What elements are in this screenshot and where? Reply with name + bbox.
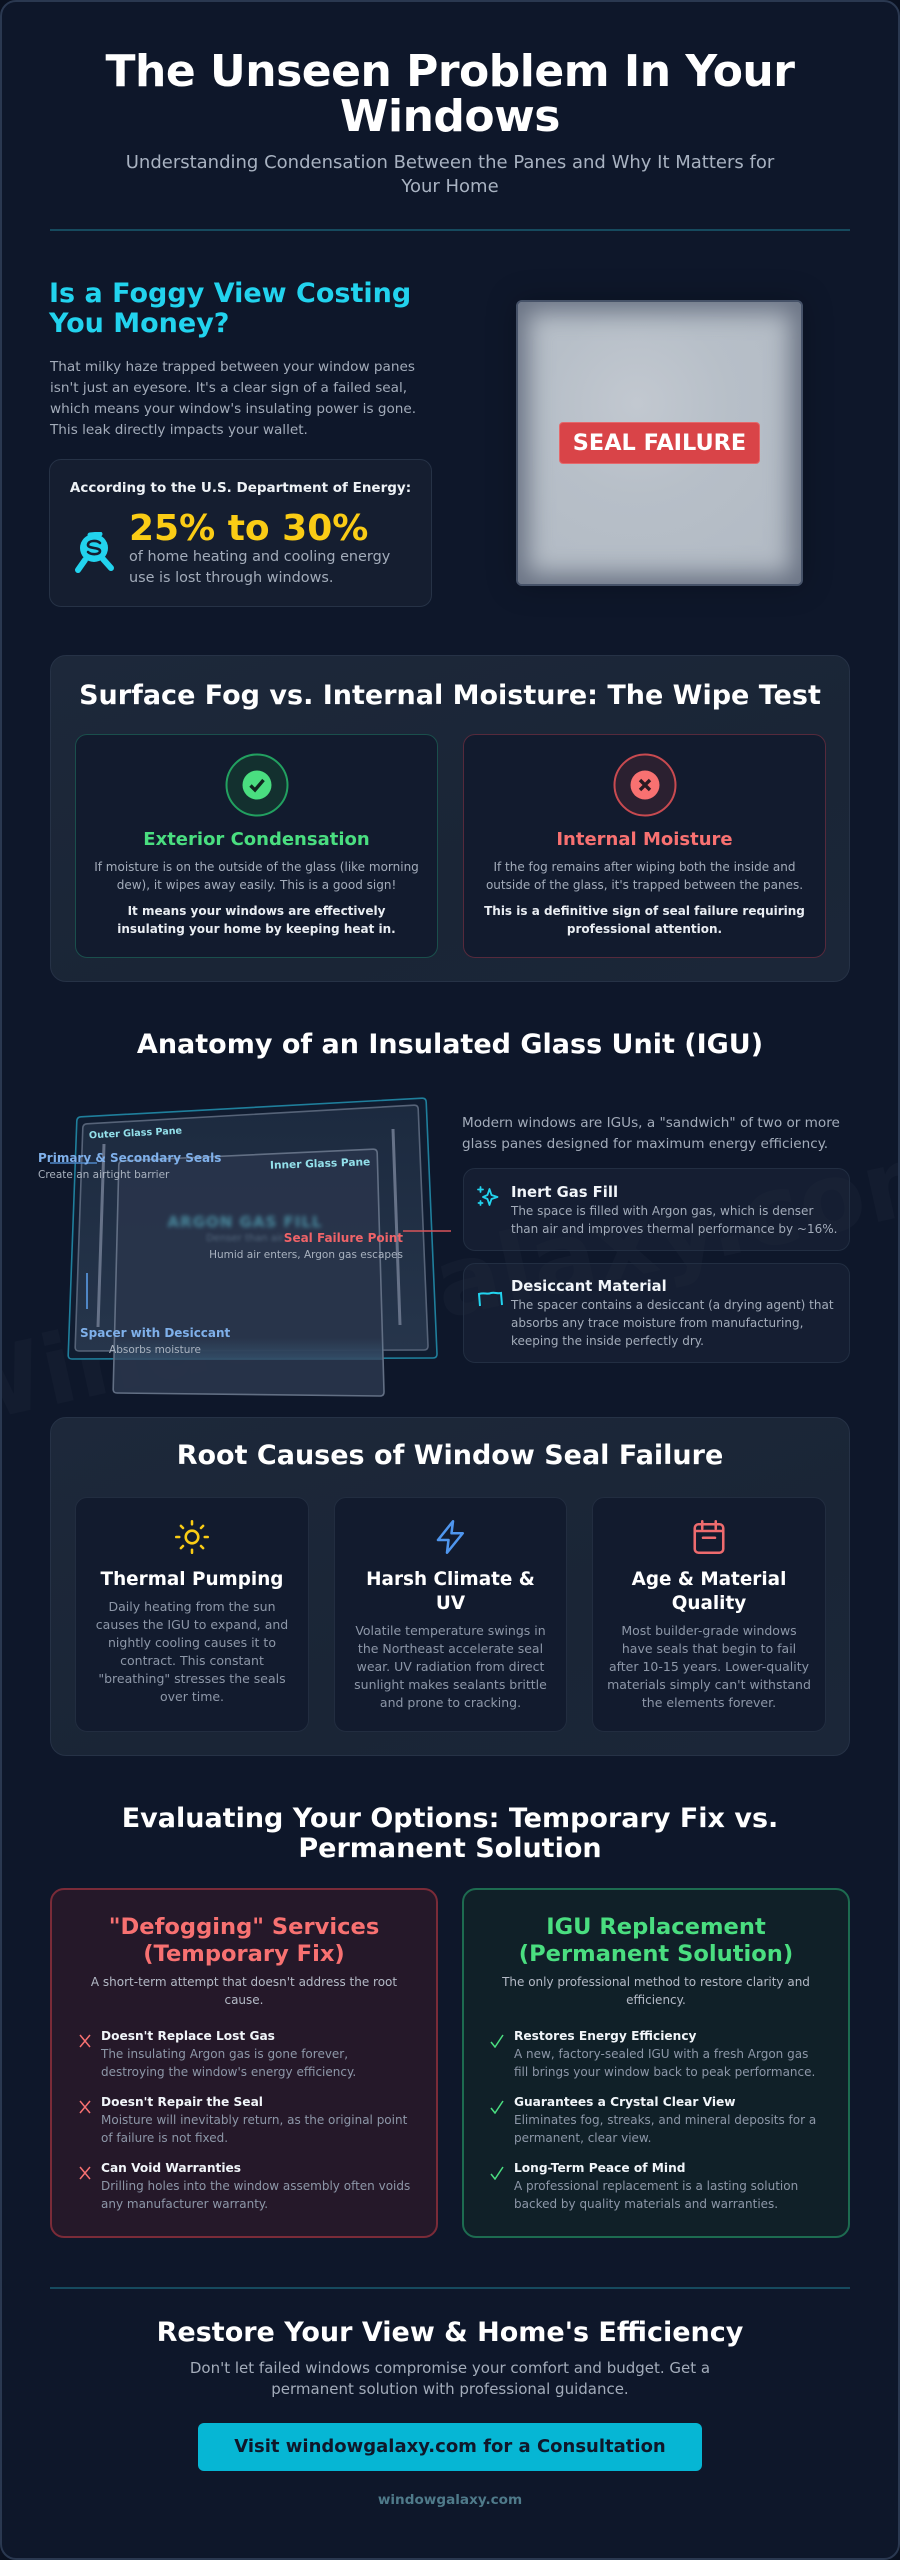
card title: UV xyxy=(436,1593,465,1614)
text: intro paragraph: That milky haze trapped between your window panes xyxy=(50,359,415,375)
subtitle: Your Home xyxy=(401,176,499,197)
title: The Unseen Problem In Your xyxy=(106,46,794,97)
icon: calendar xyxy=(693,1520,725,1554)
card text: over time. xyxy=(160,1689,224,1704)
divider xyxy=(50,2287,850,2289)
item text xyxy=(514,2045,815,2081)
icon: check xyxy=(490,2166,504,2180)
inner glass pane xyxy=(113,1149,384,1396)
card title: Harsh Climate & xyxy=(366,1569,535,1590)
panel title xyxy=(109,1914,379,1967)
card conclusion: insulating your home by keeping heat in. xyxy=(117,922,396,936)
label: spacer with desiccant: Absorbs moisture xyxy=(109,1344,201,1356)
card text: dew), it wipes away easily. This is a good sign! xyxy=(117,878,396,892)
card title: Thermal Pumping xyxy=(101,1569,283,1590)
label: seal failure point: Seal Failure Point xyxy=(284,1231,403,1245)
icon: cross xyxy=(614,754,676,816)
label: seal failure point: Humid air enters, Argon gas escapes xyxy=(209,1249,403,1261)
card conclusion: professional attention. xyxy=(567,922,722,936)
right seal xyxy=(393,1129,400,1325)
icon: spacer bracket xyxy=(478,1292,503,1306)
item title: Doesn't Repair the Seal xyxy=(101,2095,263,2109)
seal failure leader line xyxy=(403,1230,451,1232)
outer frame xyxy=(68,1098,437,1359)
panel: defogging services xyxy=(50,1888,438,2238)
card text: have seals that begin to fail xyxy=(622,1641,796,1656)
description: than air and improves thermal performance by ~16%. xyxy=(511,1222,837,1236)
card text: Volatile temperature swings in xyxy=(355,1623,546,1638)
item title: Long-Term Peace of Mind xyxy=(514,2161,686,2175)
card text xyxy=(607,1623,811,1710)
card: desiccant material xyxy=(463,1263,850,1363)
label: inner glass pane: Inner Glass Pane xyxy=(270,1156,370,1172)
description xyxy=(510,1298,834,1348)
heading: foggy view: You Money? xyxy=(49,308,229,339)
item text xyxy=(101,2113,408,2145)
card text: If moisture is on the outside of the glass (like morning xyxy=(94,860,419,874)
card text: the Northeast accelerate seal xyxy=(358,1641,543,1656)
panel: wipe test xyxy=(50,655,850,982)
item: lost gas xyxy=(80,2029,356,2079)
heading: foggy view: Is a Foggy View Costing xyxy=(49,278,411,309)
label: outer glass pane: Outer Glass Pane xyxy=(89,1126,182,1141)
card text: the elements forever. xyxy=(642,1695,776,1710)
outer glass pane xyxy=(75,1105,428,1351)
text: call to action: Don't let failed windows compromise your comfort and budget. Get a xyxy=(190,2359,710,2377)
title: Desiccant Material xyxy=(511,1278,667,1295)
text: intro paragraph: isn't just an eyesore. It's a clear sign of a failed seal, xyxy=(50,380,407,396)
panel title: IGU Replacement xyxy=(546,1914,766,1940)
icon: check xyxy=(226,754,288,816)
card conclusion: It means your windows are effectively xyxy=(128,904,385,918)
item text: Eliminates fog, streaks, and mineral deposits for a xyxy=(514,2113,816,2127)
item text: any manufacturer warranty. xyxy=(101,2197,268,2211)
card text: "breathing" stresses the seals xyxy=(98,1671,286,1686)
text: intro paragraph: which means your window's insulating power is gone. xyxy=(50,401,416,417)
item text: destroying the window's energy efficiency. xyxy=(101,2065,356,2079)
label: primary and secondary seals: Primary & Secondary Seals xyxy=(38,1151,221,1165)
stat source: According to the U.S. Department of Energy: xyxy=(70,480,411,496)
label: seal failure xyxy=(559,422,760,464)
card text xyxy=(96,1599,288,1704)
label: spacer with desiccant xyxy=(80,1326,230,1356)
text: IGU description xyxy=(462,1115,840,1152)
panel intro: cause. xyxy=(224,1993,264,2007)
description: The space is filled with Argon gas, which is denser xyxy=(511,1204,813,1218)
item: peace of mind xyxy=(464,2159,848,2215)
panel title: (Temporary Fix) xyxy=(143,1941,345,1967)
card conclusion xyxy=(484,904,805,936)
spacer line xyxy=(86,1273,88,1309)
footer url: windowgalaxy.com xyxy=(378,2492,522,2508)
card title xyxy=(366,1569,535,1614)
subtitle: Understanding Condensation Between the Panes and Why It Matters for xyxy=(126,152,774,173)
item text xyxy=(100,2047,356,2079)
item text: permanent, clear view. xyxy=(514,2131,651,2145)
text: IGU description: Modern windows are IGUs, a "sandwich" of two or more xyxy=(462,1115,840,1131)
card text: sunlight makes sealants brittle xyxy=(354,1677,547,1692)
heading: wipe test: Surface Fog vs. Internal Moisture: The Wipe Test xyxy=(79,680,821,711)
item title: Can Void Warranties xyxy=(101,2161,241,2175)
card: harsh climate xyxy=(334,1497,567,1732)
description: The spacer contains a desiccant (a drying agent) that xyxy=(511,1298,834,1312)
card title: Age & Material xyxy=(632,1569,786,1590)
icon: sparkle xyxy=(477,1186,498,1206)
card text: If the fog remains after wiping both the inside and xyxy=(493,860,796,874)
item text: of failure is not fixed. xyxy=(101,2131,228,2145)
card title: Internal Moisture xyxy=(556,829,733,850)
diagram: IGU anatomy xyxy=(38,1097,451,1397)
icon: cross xyxy=(80,2034,90,2048)
illustration: foggy window xyxy=(516,300,803,586)
panel title xyxy=(464,1914,848,1968)
item text: Moisture will inevitably return, as the original point xyxy=(101,2113,407,2127)
label: seal failure: SEAL FAILURE xyxy=(573,430,746,456)
item text: fill brings your window back to peak performance. xyxy=(514,2065,815,2079)
card text: and prone to cracking. xyxy=(380,1695,521,1710)
heading: options: Permanent Solution xyxy=(298,1833,602,1864)
icon: sun xyxy=(175,1520,209,1554)
panel: IGU replacement xyxy=(462,1888,850,2238)
heading: root causes: Root Causes of Window Seal Failure xyxy=(177,1440,723,1471)
card text: outside of the glass, it's trapped between the panes. xyxy=(486,878,803,892)
card title xyxy=(632,1569,786,1614)
card text: wear. UV radiation from direct xyxy=(357,1659,544,1674)
icon: lightning xyxy=(436,1520,464,1554)
card conclusion: This is a definitive sign of seal failure requiring xyxy=(484,904,805,918)
card text xyxy=(354,1623,547,1710)
item text: backed by quality materials and warranties. xyxy=(514,2197,778,2211)
stat description: of home heating and cooling energy xyxy=(129,549,390,565)
icon: check xyxy=(490,2100,504,2114)
description: absorbs any trace moisture from manufacturing, xyxy=(511,1316,803,1330)
text: call to action: permanent solution with professional guidance. xyxy=(271,2380,629,2398)
panel title: (Permanent Solution) xyxy=(519,1941,793,1967)
description: keeping the inside perfectly dry. xyxy=(511,1334,704,1348)
card text: Most builder-grade windows xyxy=(621,1623,797,1638)
panel: energy stat xyxy=(49,459,432,607)
text: intro paragraph: This leak directly impacts your wallet. xyxy=(50,422,308,438)
heading: foggy view xyxy=(48,278,411,339)
card: exterior condensation xyxy=(75,734,438,958)
card conclusion xyxy=(117,904,396,936)
item text: Drilling holes into the window assembly often voids xyxy=(101,2179,410,2193)
label: primary and secondary seals xyxy=(38,1151,221,1181)
heading: call to action: Restore Your View & Home's Efficiency xyxy=(157,2317,743,2348)
stat description: use is lost through windows. xyxy=(129,570,333,586)
icon: cross xyxy=(80,2166,90,2180)
label: spacer with desiccant: Spacer with Desiccant xyxy=(80,1326,230,1340)
panel intro: A short-term attempt that doesn't address the root xyxy=(91,1975,397,1989)
item text: The insulating Argon gas is gone forever, xyxy=(101,2047,348,2061)
card text xyxy=(94,860,419,892)
heading: options xyxy=(122,1803,778,1864)
item text xyxy=(514,2177,798,2213)
heading: options: Evaluating Your Options: Temporary Fix vs. xyxy=(122,1803,778,1834)
card text: Daily heating from the sun xyxy=(108,1599,276,1614)
item title: Guarantees a Crystal Clear View xyxy=(514,2095,736,2109)
label: argon gas fill: ARGON GAS FILL xyxy=(168,1213,322,1231)
seal leader line xyxy=(50,1162,97,1164)
item text: A new, factory-sealed IGU with a fresh Argon gas xyxy=(514,2047,808,2061)
card title: Quality xyxy=(672,1593,746,1614)
label: primary and secondary seals: Create an airtight barrier xyxy=(38,1169,169,1181)
stat description xyxy=(129,549,390,586)
item title: Doesn't Replace Lost Gas xyxy=(101,2029,275,2043)
card text: causes the IGU to expand, and xyxy=(96,1617,288,1632)
item title: Restores Energy Efficiency xyxy=(514,2029,696,2043)
panel intro: efficiency. xyxy=(626,1993,686,2007)
item text xyxy=(514,2111,816,2147)
text: IGU description: glass panes designed for maximum energy efficiency. xyxy=(462,1136,828,1152)
card: internal moisture xyxy=(463,734,826,958)
title: Windows xyxy=(340,91,560,142)
panel intro xyxy=(91,1975,397,2007)
item: seal repair xyxy=(80,2095,408,2145)
card title: Exterior Condensation xyxy=(143,829,370,850)
card text: nightly cooling causes it to xyxy=(108,1635,276,1650)
title xyxy=(106,46,795,142)
item: energy efficiency xyxy=(464,2027,848,2083)
title: Inert Gas Fill xyxy=(511,1184,618,1201)
panel: root causes xyxy=(50,1417,850,1756)
card: thermal pumping xyxy=(75,1497,309,1732)
stat value: 25% to 30% xyxy=(129,508,368,549)
item: clear view xyxy=(464,2093,848,2149)
card text: contract. This constant xyxy=(120,1653,264,1668)
left seal xyxy=(98,1144,104,1327)
button: consultation xyxy=(198,2423,702,2471)
icon: cross xyxy=(80,2100,90,2114)
item: warranties xyxy=(80,2161,410,2211)
text: call to action xyxy=(0,2358,900,2400)
card: age and quality xyxy=(592,1497,826,1732)
subtitle xyxy=(126,152,774,197)
heading: anatomy: Anatomy of an Insulated Glass Unit (IGU) xyxy=(137,1029,763,1060)
label: argon detail: Denser than air xyxy=(206,1233,284,1244)
card: inert gas fill xyxy=(463,1168,850,1251)
text: intro paragraph xyxy=(50,359,416,438)
item text: A professional replacement is a lasting solution xyxy=(514,2179,798,2193)
card text: materials simply can't withstand xyxy=(607,1677,811,1692)
description xyxy=(510,1204,837,1236)
button: consultation: Visit windowgalaxy.com for a Consultation xyxy=(234,2436,666,2457)
panel intro xyxy=(464,1973,848,2009)
icon: check xyxy=(490,2034,504,2048)
divider xyxy=(50,229,850,231)
card text xyxy=(486,860,803,892)
icon: money loss xyxy=(75,532,114,573)
card text: after 10-15 years. Lower-quality xyxy=(609,1659,809,1674)
glass bottom glow xyxy=(114,1338,383,1360)
label: seal failure point xyxy=(209,1231,403,1261)
item text xyxy=(101,2177,410,2213)
panel intro: The only professional method to restore clarity and xyxy=(502,1975,810,1989)
panel title: "Defogging" Services xyxy=(109,1914,379,1940)
